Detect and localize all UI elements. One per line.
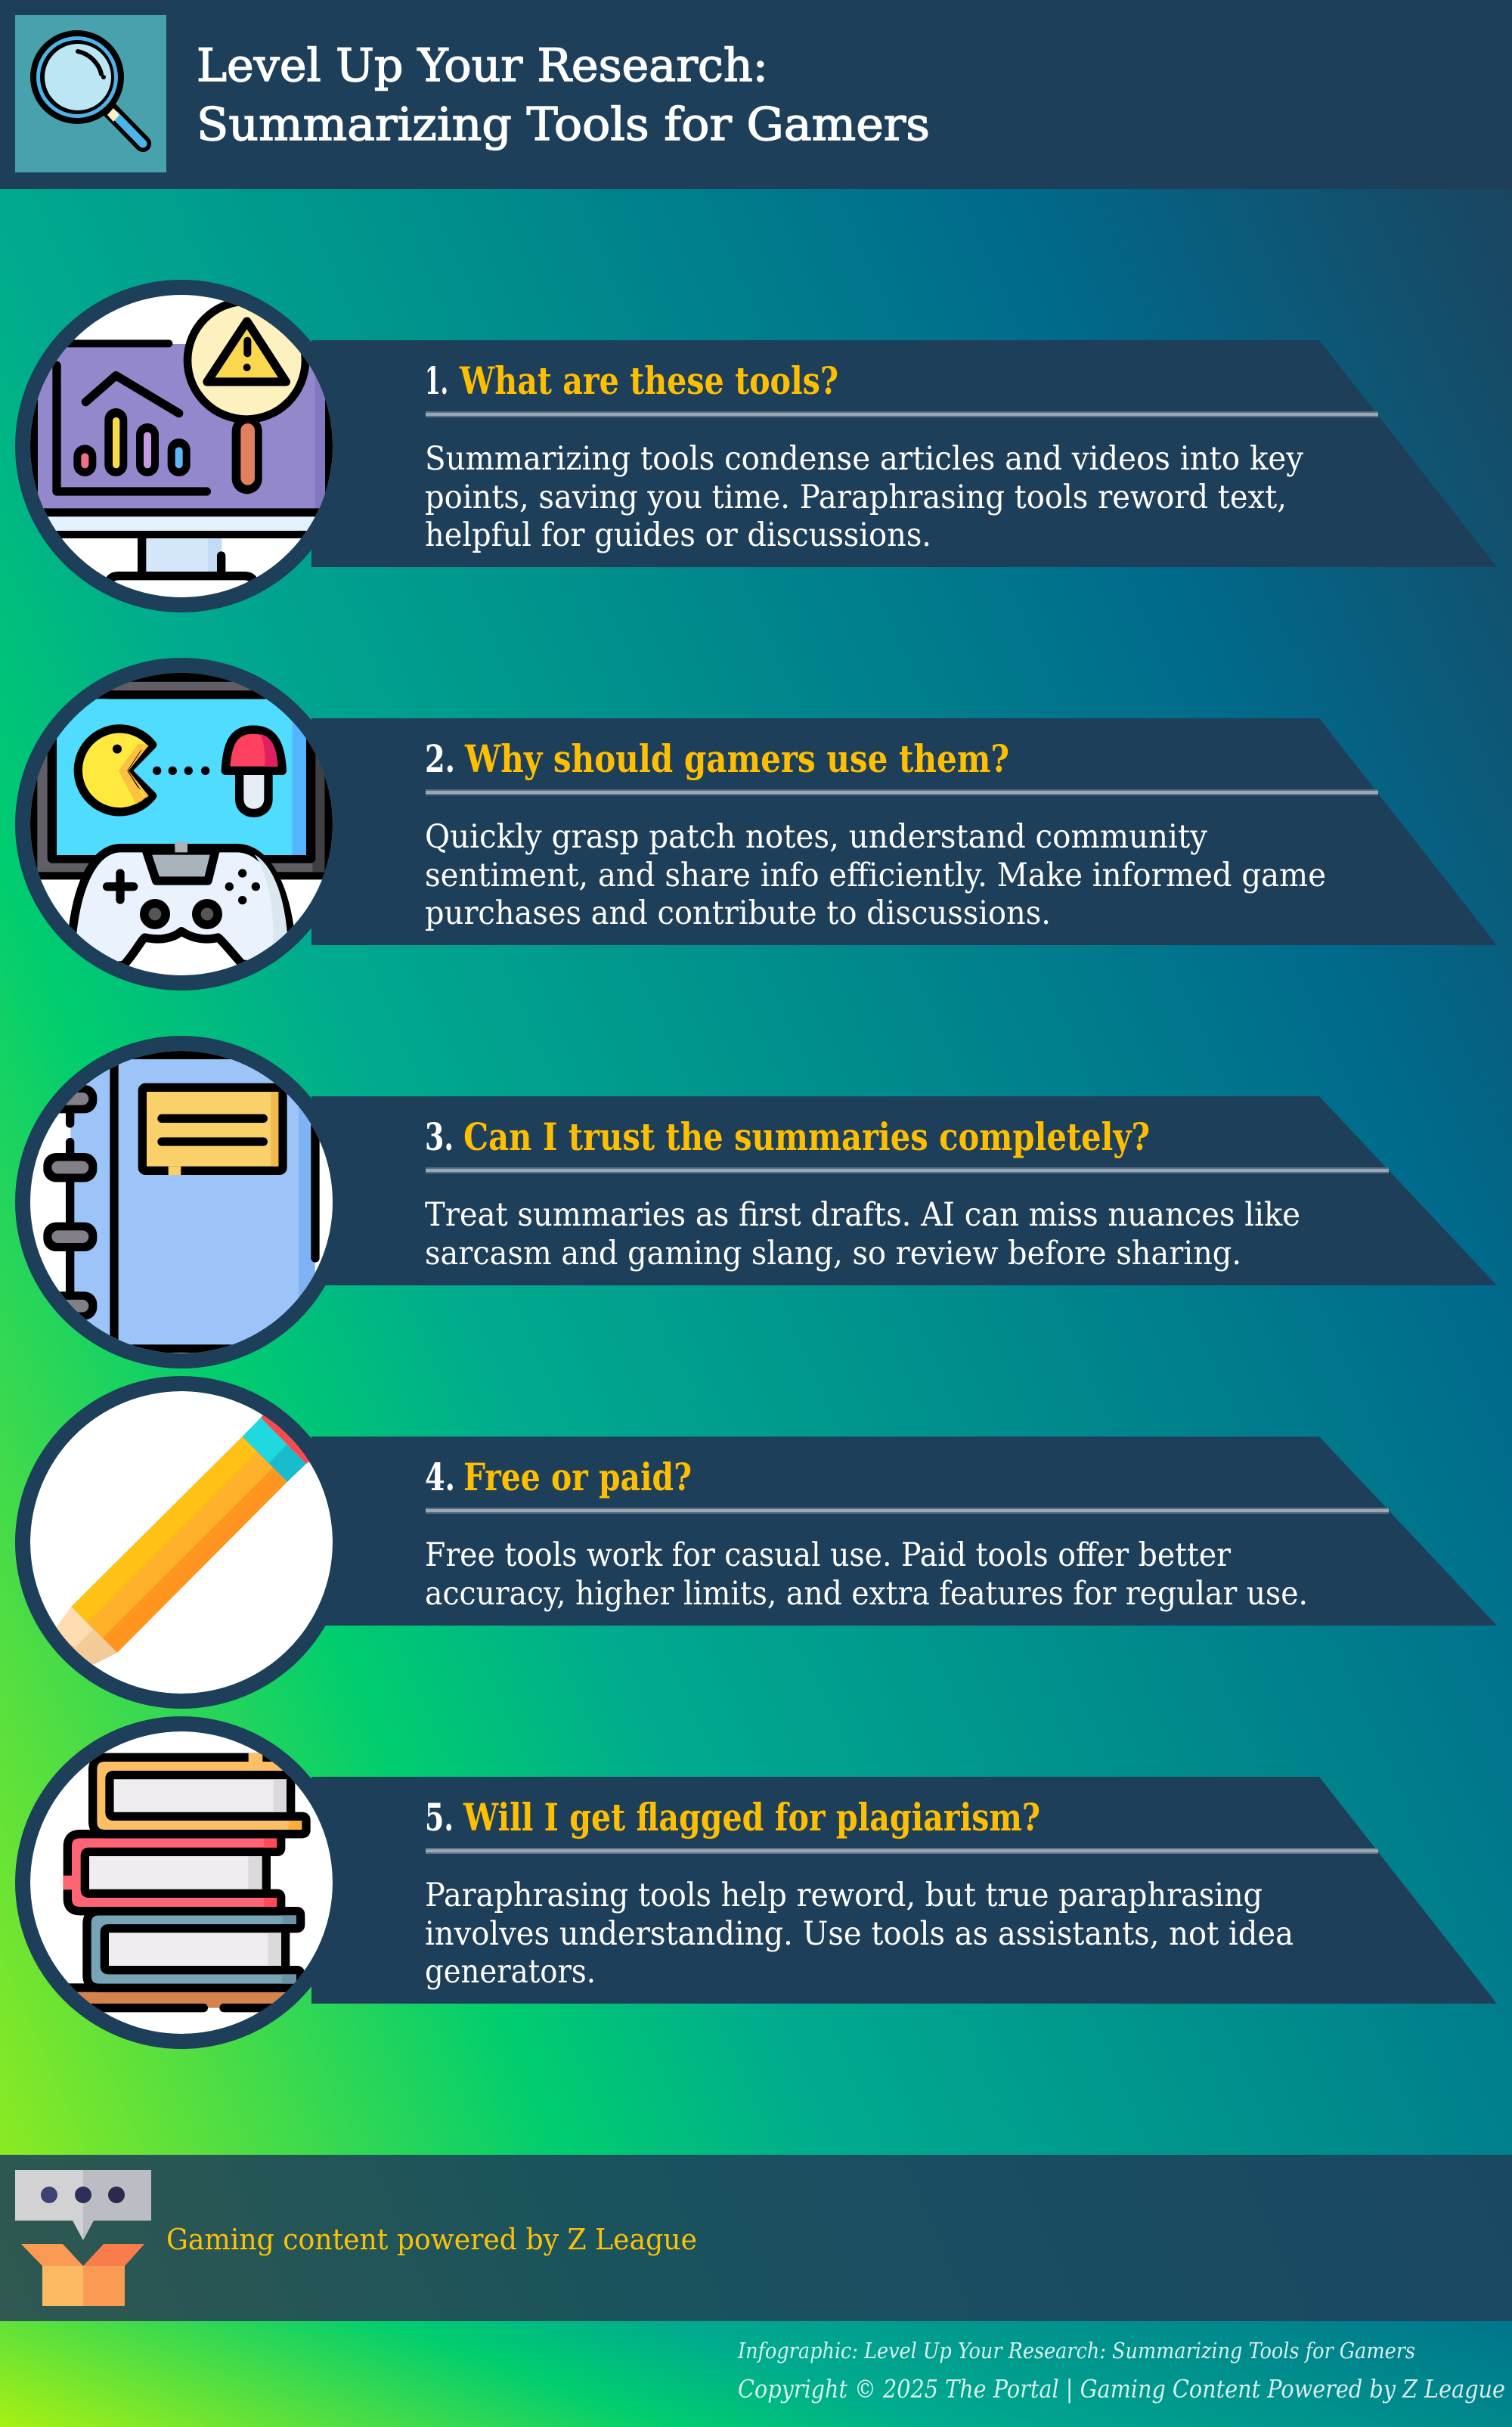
title <box>197 39 930 151</box>
body text 1 <box>425 440 1304 554</box>
body text 5 <box>425 1877 1294 1991</box>
heading 3: Can I trust the summaries completely? <box>463 1114 1150 1159</box>
panel: why should gamers use them <box>311 718 1497 945</box>
footer brand text: Gaming content powered by Z League <box>166 2223 697 2256</box>
body text 4 <box>425 1536 1308 1613</box>
body text 5: generators. <box>425 1953 596 1991</box>
icon: speech bubble and open box <box>15 2170 151 2306</box>
panel: can I trust the summaries <box>311 1096 1497 1285</box>
heading 2: 2. <box>425 736 455 781</box>
body text 2 <box>425 818 1326 932</box>
body text 2: sentiment, and share info efficiently. Make informed game <box>425 857 1326 894</box>
panel: plagiarism <box>311 1777 1497 2004</box>
body text 2: Quickly grasp patch notes, understand community <box>425 818 1208 856</box>
body text 5: involves understanding. Use tools as assistants, not idea <box>425 1915 1294 1953</box>
heading 4: 4. <box>425 1455 455 1499</box>
title: Summarizing Tools for Gamers <box>197 98 930 151</box>
icon: monitor with warning magnifier <box>15 280 348 612</box>
header band <box>0 0 1512 189</box>
body text 2: purchases and contribute to discussions. <box>425 894 1051 932</box>
body text 4: Free tools work for casual use. Paid tools offer better <box>425 1536 1231 1574</box>
credit text: Infographic: Level Up Your Research: Summarizing Tools for Gamers <box>737 2338 1415 2363</box>
body text 1: Summarizing tools condense articles and videos into key <box>425 440 1304 478</box>
heading 4: Free or paid? <box>463 1455 692 1499</box>
icon: game screen and controller <box>15 658 348 990</box>
panel: free or paid <box>311 1437 1497 1626</box>
footer band <box>0 2155 1512 2321</box>
body text 5: Paraphrasing tools help reword, but true paraphrasing <box>425 1877 1263 1914</box>
heading 2: Why should gamers use them? <box>464 736 1009 781</box>
heading 3: 3. <box>425 1114 454 1159</box>
body text 1: helpful for guides or discussions. <box>425 516 931 554</box>
heading 5: Will I get flagged for plagiarism? <box>463 1795 1040 1840</box>
credit text <box>737 2338 1505 2404</box>
heading 5: 5. <box>425 1795 454 1840</box>
body text 4: accuracy, higher limits, and extra features for regular use. <box>425 1575 1308 1613</box>
panel: what are these tools <box>311 340 1497 567</box>
icon: stack of books <box>15 1716 348 2049</box>
icon: notebook <box>15 1036 348 1368</box>
icon: pencil <box>15 1376 348 1709</box>
icon: magnifying glass <box>15 15 166 172</box>
heading 1: 1. <box>425 358 448 403</box>
body text 3 <box>425 1196 1300 1272</box>
title: Level Up Your Research: <box>197 39 768 92</box>
body text 3: Treat summaries as first drafts. AI can miss nuances like <box>425 1196 1300 1234</box>
body text 1: points, saving you time. Paraphrasing tools reword text, <box>425 479 1287 516</box>
heading 1: What are these tools? <box>459 358 838 403</box>
body text 3: sarcasm and gaming slang, so review before sharing. <box>425 1235 1241 1272</box>
